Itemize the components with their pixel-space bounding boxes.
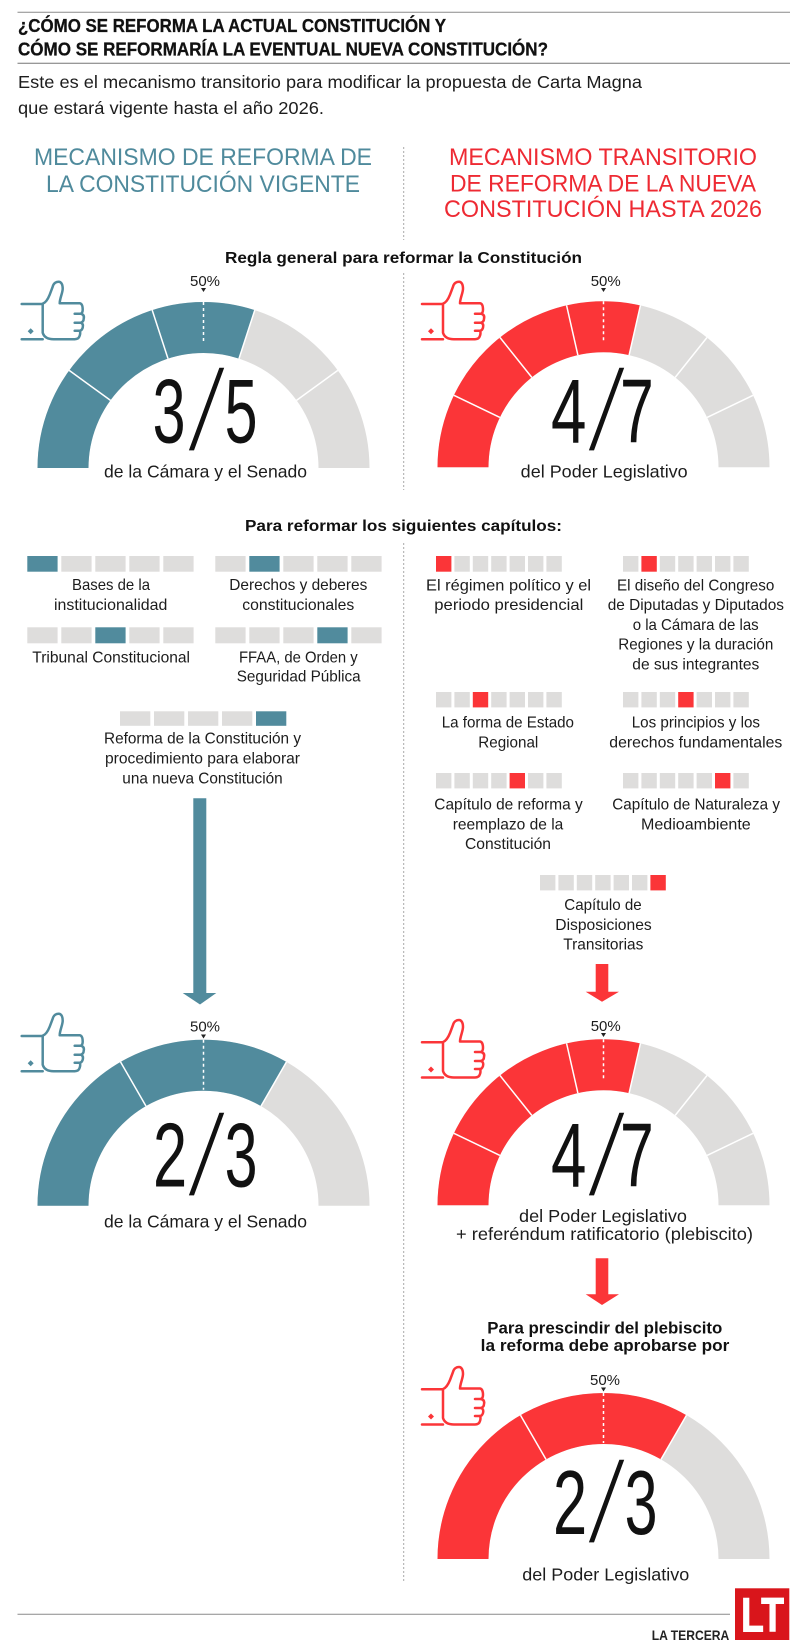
chapter: Naturaleza y Medioambiente: Capítulo de Naturaleza y	[612, 796, 780, 813]
chapter: Tribunal Constitucional	[27, 627, 194, 666]
chapter: Naturaleza y Medioambiente	[612, 773, 780, 833]
chapter: diseño del Congreso: o la Cámara de las	[633, 617, 759, 634]
heading: current constitution mechanism: LA CONSTITUCIÓN VIGENTE	[46, 171, 360, 198]
chapter: Tribunal Constitucional: Tribunal Constitucional	[32, 649, 190, 666]
chapter: Disposiciones Transitorias: Disposiciones	[555, 917, 652, 934]
big number 2/3: /	[184, 1089, 229, 1223]
heading: transitional mechanism: DE REFORMA DE LA NUEVA	[450, 171, 757, 198]
big number 2/3	[153, 1089, 258, 1223]
panel: skip plebiscite threshold	[422, 1367, 744, 1585]
icon: thumbs up	[422, 1367, 484, 1424]
logo: LT: LT	[741, 1590, 784, 1643]
chapter: reforma y reemplazo	[434, 773, 583, 853]
big number 4/7: 7	[620, 1105, 654, 1207]
intro text	[18, 72, 642, 118]
big number 4/7	[551, 1089, 654, 1223]
gauge label: del Poder Legislativo	[521, 462, 688, 482]
arrow: red down	[586, 964, 619, 1002]
chapter: régimen político	[426, 556, 591, 614]
icon: thumbs up	[22, 282, 84, 339]
panel: chapters, transitional	[426, 556, 784, 953]
chapter: régimen político: periodo presidencial	[434, 597, 583, 614]
heading: current constitution mechanism: MECANISMO DE REFORMA DE	[34, 144, 372, 171]
arrow: red down	[586, 1258, 619, 1305]
big number 4/7: /	[584, 1089, 629, 1223]
heading: current constitution mechanism	[34, 144, 372, 198]
gauge: 4 of 7	[454, 301, 753, 467]
arrow: teal down	[183, 798, 216, 1004]
chapter: Reforma de la Constitución	[104, 711, 301, 787]
chapter: diseño del Congreso: Regiones y la duración	[618, 636, 773, 653]
gauge label	[456, 1206, 753, 1244]
chapter: principios y derechos: derechos fundamentales	[609, 735, 782, 752]
chapter: Reforma de la Constitución: una nueva Constitución	[122, 770, 283, 787]
gauge label: + referéndum ratificatorio (plebiscito)	[456, 1224, 753, 1244]
gauge: 2 of 3	[63, 1040, 344, 1206]
icon: thumbs up	[422, 1020, 484, 1078]
gauge label: del Poder Legislativo	[519, 1206, 687, 1226]
chapter: Reforma de la Constitución: procedimiento para elaborar	[105, 750, 301, 767]
marker: 50%: 50%	[190, 273, 220, 290]
gauge label: del Poder Legislativo	[522, 1565, 689, 1585]
gauge label: de la Cámara y el Senado	[104, 1211, 307, 1231]
intro text: que estará vigente hasta el año 2026.	[18, 98, 324, 118]
chapter: Derechos y deberes: Derechos y deberes	[229, 577, 367, 594]
chapter: Bases de la institucionalidad	[27, 556, 194, 614]
chapter: Disposiciones Transitorias: Capítulo de	[564, 897, 642, 914]
big number 3/5: 3	[153, 362, 186, 463]
heading: skip plebiscite: Para prescindir del plebiscito	[487, 1318, 722, 1337]
title: CÓMO SE REFORMARÍA LA EVENTUAL NUEVA CONSTITUCIÓN?	[18, 39, 548, 60]
chapter: diseño del Congreso	[608, 556, 784, 673]
chapter: FFAA, Orden y Seguridad: Seguridad Pública	[237, 669, 361, 686]
marker: 50%: 50%	[591, 273, 621, 290]
heading: skip plebiscite	[481, 1318, 730, 1355]
heading: skip plebiscite: la reforma debe aprobarse por	[481, 1336, 730, 1355]
panel: general rule, transitional	[422, 273, 753, 482]
marker: 50%: 50%	[591, 1018, 621, 1035]
marker: 50%: 50%	[190, 1019, 220, 1036]
gauge label: de la Cámara y el Senado	[104, 462, 307, 482]
credit: La Tercera: LA TERCERA	[652, 1627, 729, 1643]
chapter: FFAA, Orden y Seguridad	[215, 627, 382, 686]
big number 2/3	[553, 1436, 658, 1570]
heading: chapters: Para reformar los siguientes capítulos:	[245, 518, 562, 535]
chapter: reforma y reemplazo: reemplazo de la	[453, 816, 563, 833]
chapter: Derechos y deberes: constitucionales	[242, 597, 354, 614]
panel: general rule, current constitution	[22, 273, 344, 482]
chapter: forma de Estado: La forma de Estado	[442, 715, 574, 732]
panel: special chapters, transitional	[422, 1018, 753, 1244]
panel: special chapters, current constitution	[22, 1014, 344, 1231]
chapter: principios y derechos	[609, 692, 782, 752]
big number 2/3: /	[584, 1436, 629, 1570]
big number 4/7: 4	[551, 360, 586, 462]
big number 2/3: 2	[553, 1453, 587, 1554]
gauge: 3 of 5	[63, 302, 344, 468]
big number 3/5: 5	[225, 362, 258, 463]
chapter: principios y derechos: Los principios y los	[632, 715, 760, 732]
big number 3/5: /	[184, 344, 229, 478]
big number 2/3: 3	[625, 1453, 658, 1554]
chapter: reforma y reemplazo: Constitución	[465, 836, 551, 853]
panel: chapters, current constitution	[27, 556, 382, 787]
chapter: FFAA, Orden y Seguridad: FFAA, de Orden y	[239, 649, 358, 666]
chapter: Derechos y deberes	[215, 556, 382, 614]
chapter: reforma y reemplazo: Capítulo de reforma y	[434, 796, 583, 813]
chapter: Bases de la institucionalidad: Bases de la	[72, 577, 150, 594]
title	[18, 15, 548, 60]
chapter: forma de Estado	[436, 692, 574, 752]
marker: 50%: 50%	[590, 1372, 620, 1389]
icon: thumbs up	[422, 282, 484, 339]
chapter: Disposiciones Transitorias	[540, 875, 666, 953]
gauge: 4 of 7	[454, 1039, 753, 1205]
big number 2/3: 2	[153, 1106, 187, 1206]
chapter: diseño del Congreso: de sus integrantes	[632, 656, 759, 673]
heading: transitional mechanism	[444, 144, 762, 223]
heading: transitional mechanism: CONSTITUCIÓN HASTA 2026	[444, 196, 762, 223]
chapter: diseño del Congreso: de Diputadas y Diputados	[608, 597, 784, 614]
chapter: Reforma de la Constitución: Reforma de la Constitución y	[104, 730, 301, 747]
heading: general rule: Regla general para reformar la Constitución	[225, 250, 582, 267]
big number 4/7: /	[584, 344, 629, 478]
big number 4/7	[551, 344, 654, 478]
big number 3/5	[153, 344, 258, 478]
big number 2/3: 3	[225, 1106, 258, 1207]
chapter: Naturaleza y Medioambiente: Medioambiente	[641, 816, 751, 833]
intro text: Este es el mecanismo transitorio para modificar la propuesta de Carta Magna	[18, 72, 642, 92]
big number 4/7: 7	[620, 361, 654, 463]
chapter: forma de Estado: Regional	[478, 735, 538, 752]
big number 4/7: 4	[551, 1104, 586, 1206]
heading: transitional mechanism: MECANISMO TRANSITORIO	[449, 144, 757, 171]
gauge: 2 of 3	[463, 1393, 744, 1559]
chapter: régimen político: El régimen político y el	[426, 578, 591, 594]
icon: thumbs up	[22, 1014, 84, 1071]
chapter: diseño del Congreso: El diseño del Congreso	[617, 578, 774, 594]
title: ¿CÓMO SE REFORMA LA ACTUAL CONSTITUCIÓN Y	[18, 15, 447, 36]
chapter: Disposiciones Transitorias: Transitorias	[563, 936, 643, 953]
chapter: Bases de la institucionalidad: institucionalidad	[54, 597, 167, 614]
